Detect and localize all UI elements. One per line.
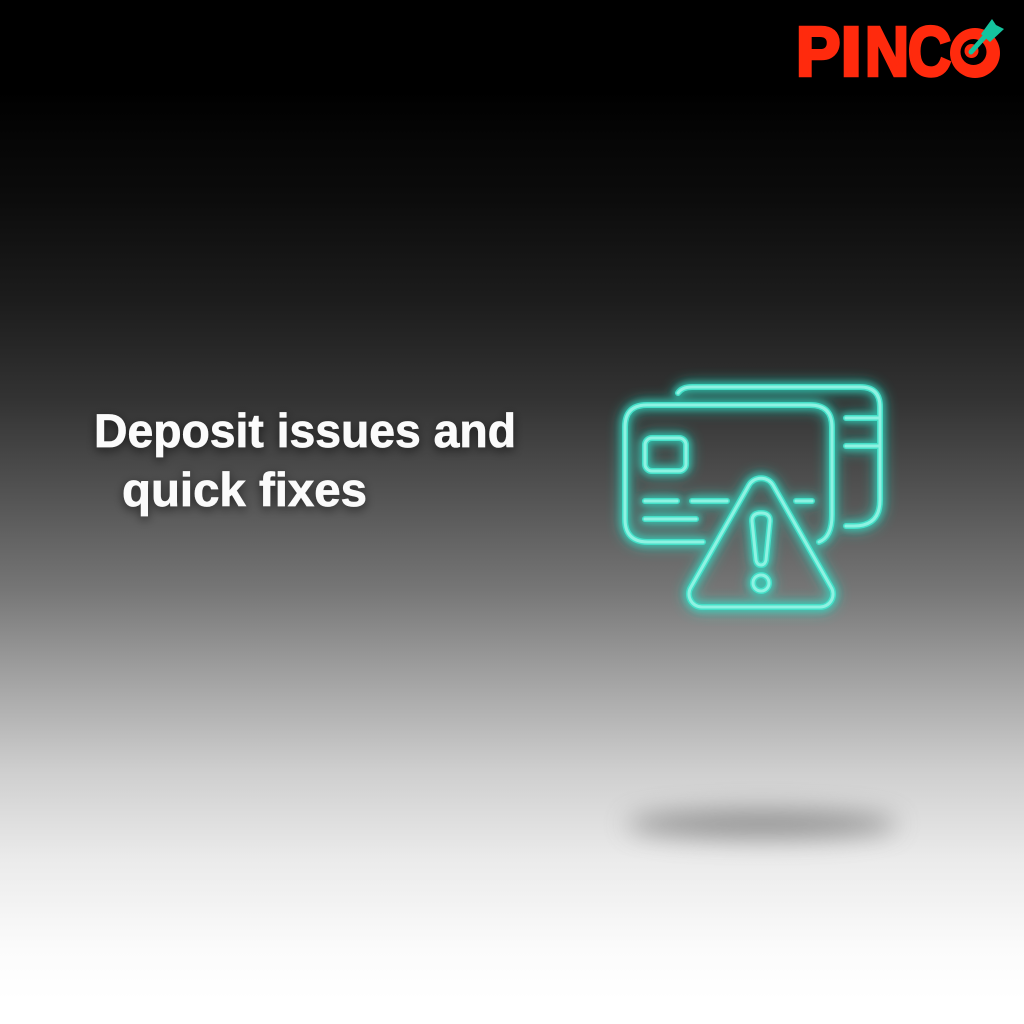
logo wordmark: N — [865, 13, 909, 90]
title: Deposit issues and — [94, 404, 516, 457]
title: quick fixes — [122, 463, 367, 516]
floating shadow under icon — [626, 810, 898, 838]
title — [94, 404, 516, 516]
icon: neon credit cards with warning triangle — [625, 387, 880, 607]
logo wordmark: I — [840, 12, 862, 91]
logo wordmark — [796, 12, 951, 91]
logo target O — [950, 28, 1000, 78]
logo wordmark: C — [908, 12, 951, 91]
logo wordmark: P — [796, 13, 840, 91]
logo arrow — [971, 19, 1004, 52]
logo: PINCO — [796, 12, 1004, 91]
